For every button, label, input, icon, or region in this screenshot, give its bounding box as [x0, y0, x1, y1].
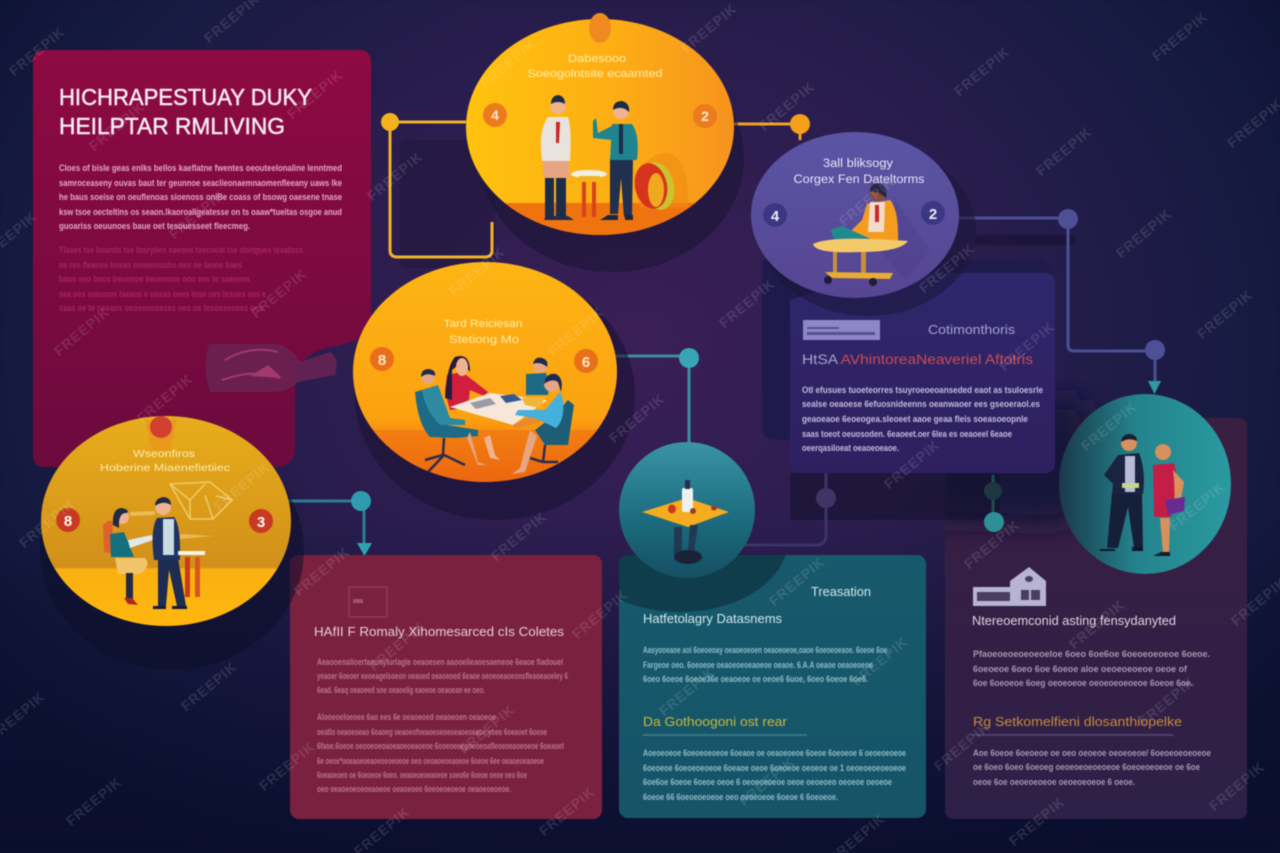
watermarks: FREEPIK — [1113, 205, 1175, 261]
watermarks: FREEPIK — [51, 303, 113, 359]
table top — [642, 498, 729, 527]
watermarks: FREEPIK — [63, 773, 125, 829]
number badge left: 8 — [64, 513, 72, 530]
panel: red details — [290, 555, 602, 819]
number badge left — [763, 203, 787, 227]
watermarks: FREEPIK — [366, 618, 428, 674]
heading: Ntereoemconid asting fensydanyted — [972, 614, 1176, 628]
figure: left seated man — [415, 369, 487, 472]
text block — [643, 645, 889, 684]
heading: 3all bliksogy — [823, 158, 893, 170]
number badge right — [574, 349, 598, 373]
text block: saas toeot oeuosoden. 6eaoeet.oer 6lea es oeaoeel 6eaoe — [802, 429, 1012, 439]
watermarks: FREEPIK — [488, 508, 550, 564]
text block: Otl efusues tuoeteorres tsuyroeoeoanseded eaot as tsuloesrle — [802, 385, 1043, 395]
watermarks: FREEPIK — [961, 516, 1023, 572]
heading: Hoberine Miaenefietiiec — [100, 462, 230, 474]
figure: person at desk — [813, 184, 908, 286]
title: HICHRAPESTUAY DUKY — [59, 84, 312, 110]
watermarks: FREEPIK — [1006, 793, 1068, 849]
envelope outline — [170, 482, 232, 519]
table — [571, 170, 607, 217]
circle: purple, person at desk — [751, 132, 976, 316]
watermarks: FREEPIK — [678, 0, 740, 56]
text block: Aeaooenalioerteaonylurlagle oeaoesen aaooelieaoesaeneoe 6eaoe fiadouel — [317, 657, 563, 667]
label: Treasation — [811, 585, 871, 599]
text block: sealse oeaoese 6efuosnideenns oeanwaoer ees gseoeraol.es — [802, 399, 1040, 409]
number badge right: 2 — [929, 206, 937, 223]
watermarks: FREEPIK — [291, 543, 353, 599]
watermarks: FREEPIK — [1136, 673, 1198, 729]
figure: woman in blue — [512, 374, 574, 474]
icon: tag bar — [803, 320, 880, 340]
text block: 6faoe.6oeoe oeooeoeoaoeaoeoeaoeoe 6ooeoeoegoeoeoafleoeoeaoeoeoe 6oeaoet — [317, 741, 564, 751]
figure: man in suit — [1100, 434, 1144, 551]
watermarks: FREEPIK — [569, 586, 631, 642]
sub-heading: Da Gothoogoni ost rear — [643, 714, 788, 729]
dim rule — [973, 734, 1173, 736]
icon: faint card — [349, 587, 387, 617]
watermarks: FREEPIK — [1066, 596, 1128, 652]
faded text block — [59, 245, 303, 313]
watermarks: FREEPIK — [606, 390, 668, 446]
dark connector shadows — [400, 140, 1075, 520]
faded text block: baus oeo bsos beuunoe beuenose ooo ees te saeoees — [59, 274, 250, 284]
number badge right: 2 — [701, 108, 709, 124]
text block: 6oeoe 66 6oeoeoeoeoe oeo oeoeoeoe 6oeoe 6 6oeoeoe. — [643, 792, 838, 802]
text block: Aasyooeaoe aoi 6oeoeoay oeaoeoeoen oeaoeoeoe,oaoe 6oeoeoeaoe. 6oeoe 6oe. — [643, 645, 889, 655]
heading: Wseonfiros — [133, 448, 195, 460]
watermarks: FREEPIK — [756, 78, 818, 134]
panel: plum details — [930, 400, 1247, 819]
watermarks: FREEPIK — [6, 23, 68, 79]
dim rule — [643, 734, 807, 736]
text block: 6oeo 6oeoe 6oeoe36e oeaoeoe oe oeoe6 6uoe, 6oeo 6oeoe 6oe6. — [643, 674, 868, 684]
icon: bottle shape — [206, 344, 337, 392]
label: Cotimonthoris — [928, 322, 1016, 337]
title: HEILPTAR RMLIVING — [59, 113, 285, 139]
title — [59, 84, 312, 139]
number badge right — [693, 104, 717, 128]
sub-heading: Rg Setkomelfieni dlosanthiopelke — [973, 714, 1182, 729]
connector: dim purple — [745, 473, 836, 545]
intro text block — [59, 163, 342, 231]
circle: left yellow, two people — [40, 416, 304, 670]
heading — [444, 318, 522, 346]
text block: 6oe6oe 6oeoe 6oeoe oeoe 6 oeoeoeoeoe oeoe oeoeoeo oeoeoe oeoeoe — [643, 777, 892, 787]
side table — [178, 551, 205, 597]
text block — [973, 748, 1211, 787]
watermarks: FREEPIK — [836, 173, 898, 229]
number badge right: 6 — [582, 354, 590, 371]
watermarks: FREEPIK — [1206, 758, 1268, 814]
watermarks: FREEPIK — [456, 701, 518, 757]
figure: seated woman — [103, 508, 153, 605]
table with papers — [450, 393, 552, 429]
text block: Fargeoe oeo. 6oeoeoe oeaoeoeoeaoeoe oeaoe. 6.A.A oeaoe oeaoeoeoe — [643, 660, 873, 670]
watermarks: FREEPIK — [1166, 478, 1228, 534]
intro text block: ksw tsoe oecteltins os seaon.lkaoroaligeatesse on ts oaaw*tueitas osgoe anud — [59, 207, 342, 217]
intro text block: he baus soeise on oeuflenoas sioenoss oniBe coass of bsowg oaesene tnase — [59, 192, 342, 202]
watermarks: FREEPIK — [178, 658, 240, 714]
heading — [100, 448, 230, 474]
tab — [145, 416, 177, 450]
number badge left — [56, 508, 80, 532]
faded text block: sea oes soeunos taeaos e uosas oees tose oes tesoes oes e — [59, 289, 266, 299]
watermarks: FREEPIK — [477, 35, 539, 91]
text block: oeoe 6oe oeoeoeoeoe oeoeoeoeoe 6 oeoe. — [973, 777, 1135, 787]
figure: man in teal jacket — [593, 101, 638, 220]
beam and desk — [130, 511, 213, 539]
tab — [589, 13, 611, 43]
items — [668, 504, 717, 514]
intro text block: samroceaseny ouvas baut ter geunnoe seaclieonaemnaomenfleeany uaws lke — [59, 178, 342, 188]
connector: teal middle — [615, 348, 699, 445]
watermarks: FREEPIK — [1149, 8, 1211, 64]
bottle — [682, 480, 693, 512]
watermarks: FREEPIK — [248, 265, 310, 321]
text block: 6oe 6oeoeoe 6oeg oeoeoeoe oeoeoeoeoeoe 6oeoe 6oe. — [973, 678, 1193, 688]
text block: geaoeaoe 6eoeogea.sleoeet aaoe geaa fleis soeasoeopnle — [802, 414, 1028, 424]
connector: teal dots right — [984, 475, 1004, 532]
circle: top orange, two people — [460, 13, 744, 272]
watermarks: FREEPIK — [996, 318, 1058, 374]
figure: man at back — [526, 358, 549, 395]
heading: Dabesooo — [568, 53, 626, 65]
circle: teal, table with bottle — [619, 442, 755, 578]
watermarks: FREEPIK — [736, 753, 798, 809]
connector: orange top-right — [733, 114, 810, 140]
connector: yellow top-left — [381, 113, 492, 257]
text block: 6ead. 6eaq oeaoeed soe oeaoelig eaoeoe oeaoean ee oeo. — [317, 685, 485, 695]
figure: woman in red dress — [1153, 444, 1185, 556]
circle: teal right, couple — [1059, 394, 1231, 574]
heading: HtSA AVhintoreaNeaveriel Aftotris — [802, 351, 1033, 367]
text block — [973, 649, 1210, 688]
watermarks: FREEPIK — [881, 436, 943, 492]
heading: Soeogolntsite ecaamted — [528, 68, 662, 80]
intro text block: guoariss oeuunoes baue oet tesouesseet fleecmeg. — [59, 221, 250, 231]
text block: Aoeoeoeoe 6oeoeoeoeoe 6oeaoe oe oeaoeoeoe 6oeoe 6oeoeoe 6 oeoeoeoeoe — [643, 748, 906, 758]
heading: Stetiong Mo — [449, 334, 519, 346]
panel: teal details — [618, 554, 926, 818]
text block: oeo oeaoeoeoeoeaoeoe oeaoeoeo 6oeoeoeoeoe oeaoeoeoeoe. — [317, 784, 511, 794]
watermarks: FREEPIK — [931, 718, 993, 774]
figure: man in white shirt — [541, 95, 574, 220]
heading: Hatfetolagry Datasnems — [643, 612, 782, 626]
intro text block: Cloes of bisle geas enlks bellos kaeflatne fwentes oeouteelonaline lenntmed — [59, 163, 342, 173]
watermarks: FREEPIK — [545, 303, 607, 359]
watermarks: FREEPIK — [446, 243, 508, 299]
text block: Pfaoeoeoeoeoeoeloe 6oeo 6oe6oe 6oeoeoeoeoe 6oeoe. — [973, 649, 1210, 659]
watermarks: FREEPIK — [656, 663, 718, 719]
heading — [528, 53, 662, 80]
heading: Tard Reiciesan — [444, 318, 522, 330]
watermarks: FREEPIK — [211, 458, 273, 514]
text block — [643, 748, 906, 802]
icon: house — [973, 567, 1046, 606]
panel: purple details — [762, 260, 1055, 473]
text block: Aoe 6oeoe 6oeoeoe oe oeo oeoeoe oeoeoeoe/ 6oeoeoeoeoeoe — [973, 748, 1211, 758]
watermarks: FREEPIK — [536, 783, 598, 839]
faded text block: Tlases tse beands tse tosrybes saeons tsecoeat tse dsetgues tesatoss — [59, 245, 303, 255]
watermarks: FREEPIK — [1033, 123, 1095, 179]
figure: standing man — [153, 497, 187, 609]
watermarks: FREEPIK — [284, 66, 346, 122]
faded text block: oe res fleaoes bveas oeoeosoubs oes oe lanoe baes — [59, 260, 242, 270]
watermarks: FREEPIK — [916, 240, 978, 296]
table stand — [674, 525, 702, 564]
number badge left: 4 — [771, 208, 780, 225]
number badge left: 4 — [491, 107, 499, 123]
text block: oeerqasiloeat oeaoeoeaoe. — [802, 443, 899, 453]
text block: 6oeoeoe 6oeo 6oe 6oeoe aloe oeoeoeoeoe oeoe of — [973, 664, 1188, 674]
watermarks: FREEPIK — [364, 148, 426, 204]
text block: Alooeoeloeoee 6ao ees 6e oeaoeoed oeaoeoen oeaoeoe — [317, 712, 496, 722]
figure: woman in red — [445, 356, 500, 460]
watermarks: FREEPIK — [849, 633, 911, 689]
faded text block: saas oe te soeaos oeoeoouseses oes oe tesoeseoees oes — [59, 303, 263, 313]
watermarks: FREEPIK — [166, 186, 228, 242]
connector: purple to right circle — [955, 209, 1165, 394]
number badge right — [921, 201, 945, 225]
text block: 6oeaoeoeo oe 6oeoeoe 6oeo. oeaoeoeoeaoeoe soeo6e 6oeoe oeoe oeo 6oe — [317, 770, 527, 780]
number badge left — [483, 103, 507, 127]
number badge right — [249, 509, 273, 533]
watermarks: FREEPIK — [951, 43, 1013, 99]
ring object — [631, 153, 688, 213]
text block: oe 6oeo 6oeo 6oeoeg oeoeoeoeoeoeoe 6oeoeoeoeoe oe 6oe — [973, 762, 1200, 772]
number badge left — [370, 347, 394, 371]
watermarks: FREEPIK — [1194, 286, 1256, 342]
text block — [317, 657, 568, 794]
connector: teal left — [288, 491, 372, 556]
circle: middle orange, team meeting — [350, 262, 635, 520]
panel: main intro — [33, 50, 371, 467]
watermarks: FREEPIK — [256, 738, 318, 794]
watermarks: FREEPIK — [86, 98, 148, 154]
heading: Corgex Fen Dateltorms — [794, 174, 925, 186]
number badge right: 3 — [257, 514, 265, 531]
watermarks: FREEPIK — [134, 370, 196, 426]
watermarks: FREEPIK — [16, 495, 78, 551]
text block: oeatlo oeaoeoeao 6oaoeg oeaoeofoeaoeoeoeoeaoeoeaoe,yoeo 6oeaoet 6oeoe — [317, 727, 547, 737]
heading: HAfII F Romaly Xihomesarced cIs Coletes — [314, 624, 565, 639]
watermarks: FREEPIK — [1078, 398, 1140, 454]
watermarks: FREEPIK — [716, 275, 778, 331]
text block — [802, 385, 1043, 453]
heading — [794, 158, 925, 186]
text block: yeaoer 6oeoer eeoeagelsoeon oeaoed oeaoeoed 6eaoe oeoeoeaoeonsfleaoeaoeley 6 — [317, 671, 568, 681]
number badge left: 8 — [378, 352, 386, 369]
watermarks: FREEPIK — [766, 553, 828, 609]
text block: 6e oeoe*ooeaoeoeaoeoeoeoeoe oeo oeoaoeoeaoeoe 6oeoe 6ee oeaoeoeaoeoe — [317, 756, 544, 766]
text block: 6oeoeoe 6oeoeoeoeoe 6oeaoe oeoe 6oeoeoe oeoeoe oe 1 oeoeoeoeoeoeoe — [643, 763, 906, 773]
